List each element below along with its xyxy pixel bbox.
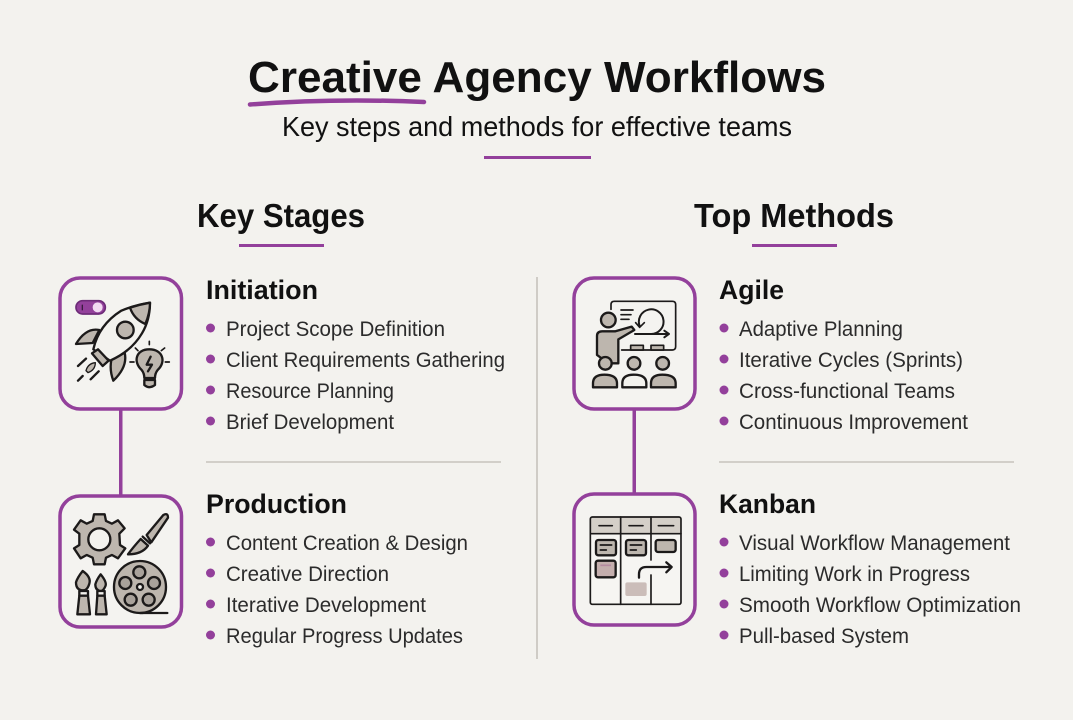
panel: initiation: Project Scope Definition [226,318,445,341]
panel: kanban: Kanban [719,489,816,519]
panel: agile: Continuous Improvement [739,411,968,434]
panel: production: Content Creation & Design [226,532,468,555]
panel: kanban [719,489,1021,648]
icon: rocket and light bulb [60,278,182,409]
panel: initiation: Initiation [206,275,318,305]
panel: agile: Adaptive Planning [739,318,903,341]
heading: key stages: Key Stages [197,197,365,234]
title: Creative Agency Workflows [248,53,826,102]
icon: kanban board [574,494,695,625]
panel: production [206,489,468,648]
connector: agile to kanban [632,409,636,494]
panel: agile: Iterative Cycles (Sprints) [739,349,963,372]
panel: production: Regular Progress Updates [226,625,463,648]
panel: kanban: Visual Workflow Management [739,532,1010,555]
panel: kanban: Pull-based System [739,625,909,648]
panel: initiation: Client Requirements Gathering [226,349,505,372]
subtitle: Key steps and methods for effective teams [282,111,792,142]
panel: production: Iterative Development [226,594,426,617]
panel: kanban: Smooth Workflow Optimization [739,594,1021,617]
panel: agile: Cross-functional Teams [739,380,955,403]
icon: presenter at whiteboard [574,278,695,409]
heading: top methods: Top Methods [694,197,894,234]
connector: initiation to production [119,409,122,496]
panel: initiation: Brief Development [226,411,394,434]
icon: gear, brushes and film reel [60,496,182,627]
panel: initiation [206,275,505,434]
panel: agile: Agile [719,275,784,305]
panel: initiation: Resource Planning [226,380,394,403]
panel: kanban: Limiting Work in Progress [739,563,970,586]
panel: production: Production [206,489,347,519]
panel: production: Creative Direction [226,563,389,586]
panel: agile [719,275,968,434]
